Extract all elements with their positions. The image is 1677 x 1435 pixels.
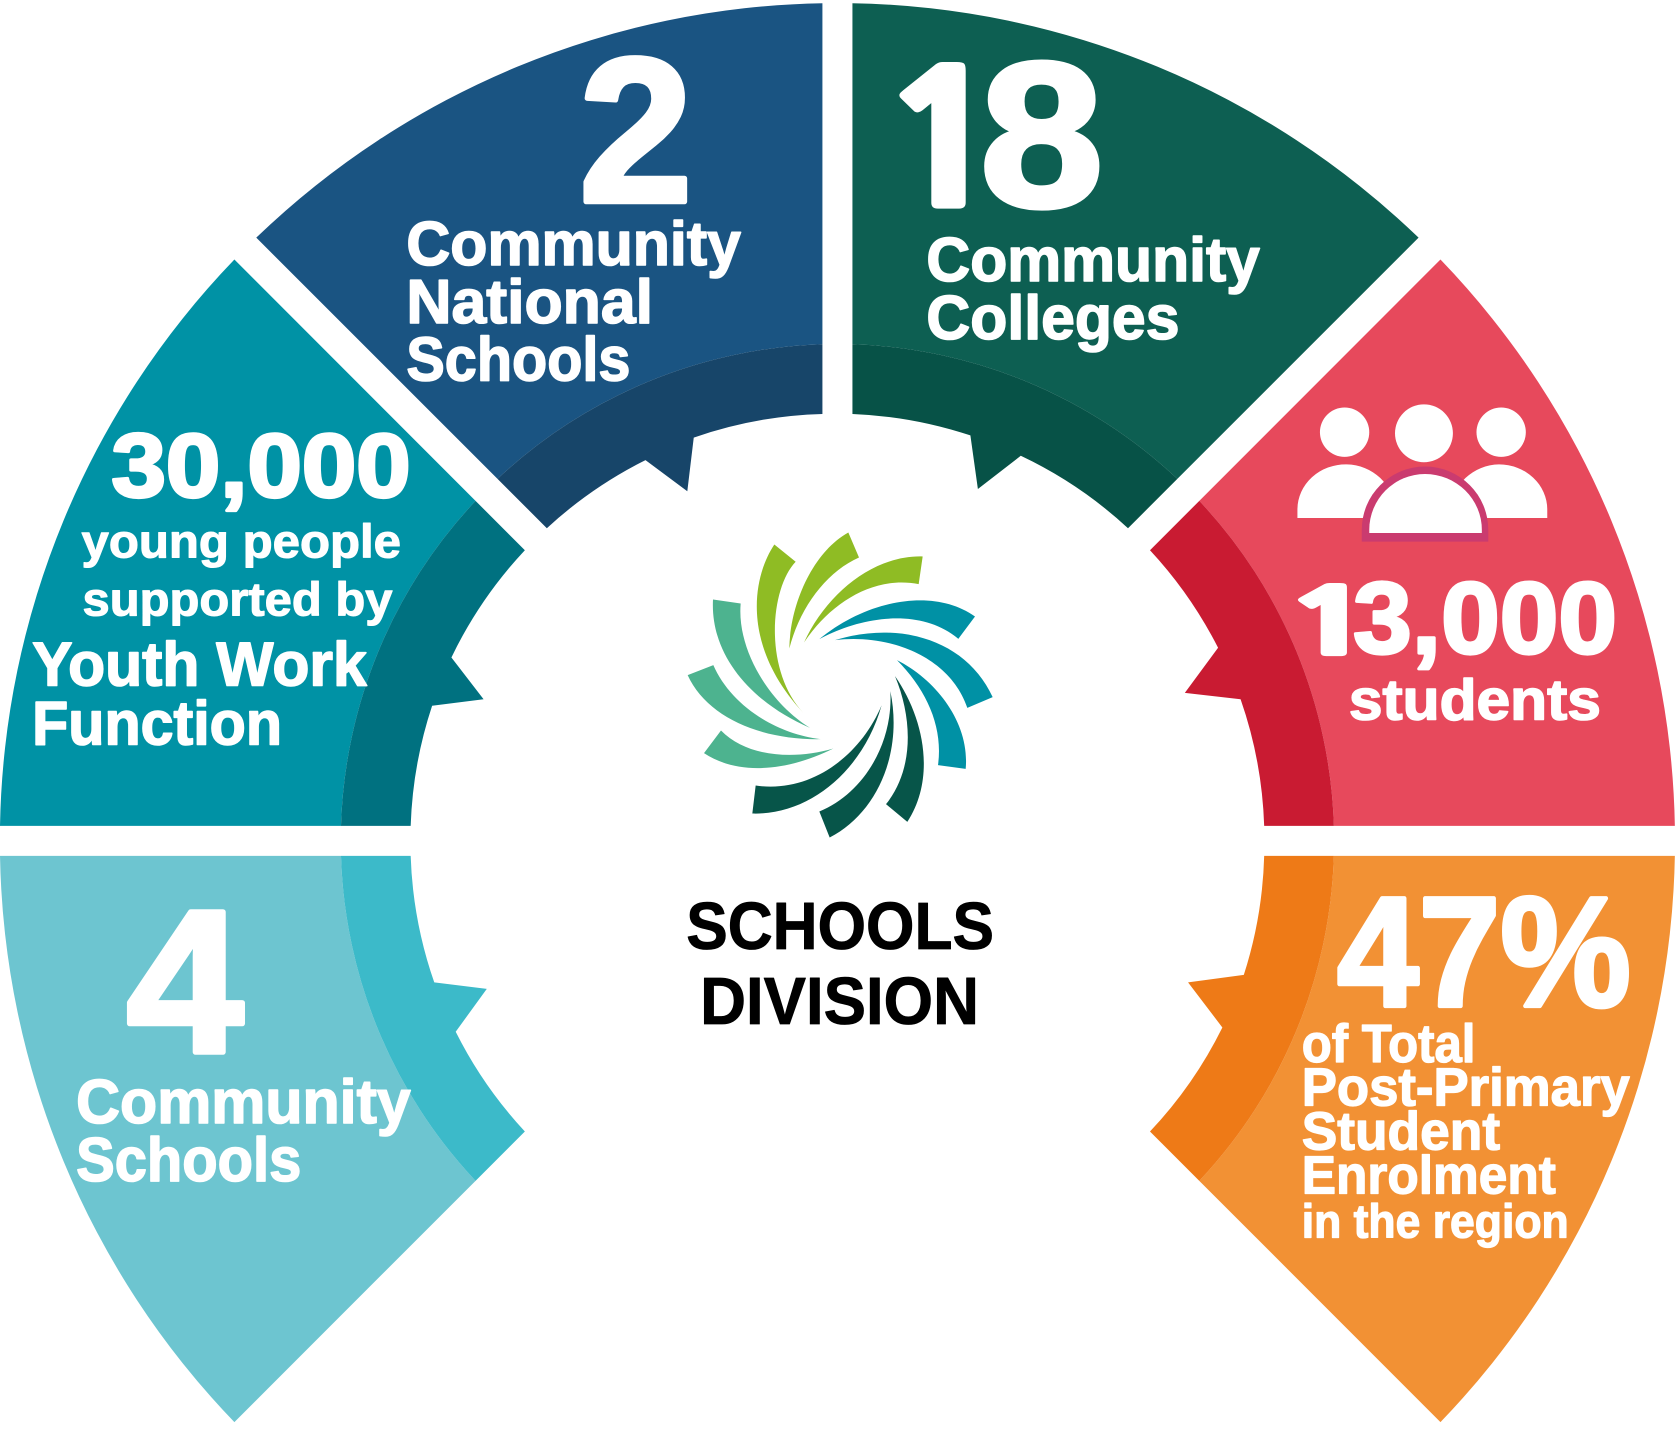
label: Community Schools [76,1068,411,1195]
number: 18: 1 [879,50,1009,233]
heading: Schools Division [686,890,994,1039]
number: 13,000: 1 [1285,577,1377,667]
label: Community National Schools: Community [406,210,741,279]
label: Community Colleges: Colleges [926,284,1179,353]
number: 30,000: 30,000 [112,416,411,517]
label: Community Colleges: Community [926,226,1260,295]
panel: enrolment share [1150,856,1675,1422]
panel: community national schools [256,3,822,528]
label: Community Schools: Schools [76,1126,301,1195]
label: of Total Post-Primary Student Enrolment in the region: in the region [1302,1195,1569,1248]
label: students: students [1349,669,1601,733]
label: of Total Post-Primary Student Enrolment in the region: Student [1302,1102,1500,1162]
label: of Total Post-Primary Student Enrolment in the region: Post-Primary [1302,1058,1630,1118]
label: Community National Schools: Schools [406,326,630,395]
label: of Total Post-Primary Student Enrolment in the region: of Total [1302,1014,1475,1074]
label: Community Colleges [926,226,1260,353]
number: 13,000: 3,000 [1353,563,1617,675]
label: young people supported by Youth Work Function: supported by [83,573,392,626]
number: 18: 8 [980,20,1103,250]
label: of Total Post-Primary Student Enrolment in the region: Enrolment [1302,1146,1556,1206]
label: Community National Schools: National [406,268,653,337]
number: 2: 2 [579,16,693,246]
number: 47%: 47% [1337,865,1631,1040]
panel: youth work [0,260,525,826]
label: young people supported by Youth Work Function: young people [81,515,401,568]
number: 4: 4 [127,869,243,1096]
icon: pinwheel logo [688,532,993,838]
icon: group of people [1297,404,1547,542]
number: 18 [879,20,1103,250]
label: Community Schools: Community [76,1068,411,1137]
label: young people supported by Youth Work Function [32,515,401,758]
label: young people supported by Youth Work Function: Youth Work [32,630,367,699]
label: Community National Schools [406,210,741,395]
label: of Total Post-Primary Student Enrolment in the region [1302,1014,1630,1248]
panel: students [1150,260,1675,826]
panel: community schools [0,856,525,1422]
heading: Schools Division: SCHOOLS [686,890,994,964]
label: young people supported by Youth Work Function: Function [32,689,282,758]
heading: Schools Division: DIVISION [700,965,979,1039]
panel: community colleges [852,3,1419,528]
